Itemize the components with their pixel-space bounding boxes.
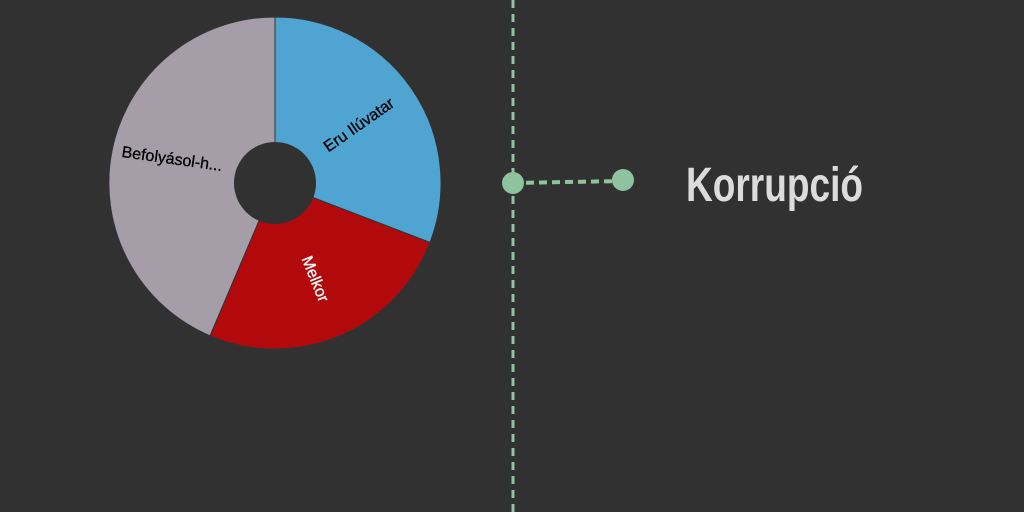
label: Melkor: Melkor <box>298 254 332 305</box>
connector <box>502 169 634 194</box>
timeline: dashed vertical line <box>512 0 514 512</box>
donut chart <box>109 17 441 349</box>
heading: Korrupció: Korrupció <box>686 159 863 212</box>
label: Eru Ilúvatar: Eru Ilúvatar <box>321 95 398 156</box>
slice: Eru Ilúvatar <box>275 17 441 242</box>
slice: Melkor <box>210 183 430 349</box>
slice: Befolyásol-h <box>109 17 275 336</box>
label: Befolyásol-h: Befolyásol-h... <box>121 144 223 175</box>
